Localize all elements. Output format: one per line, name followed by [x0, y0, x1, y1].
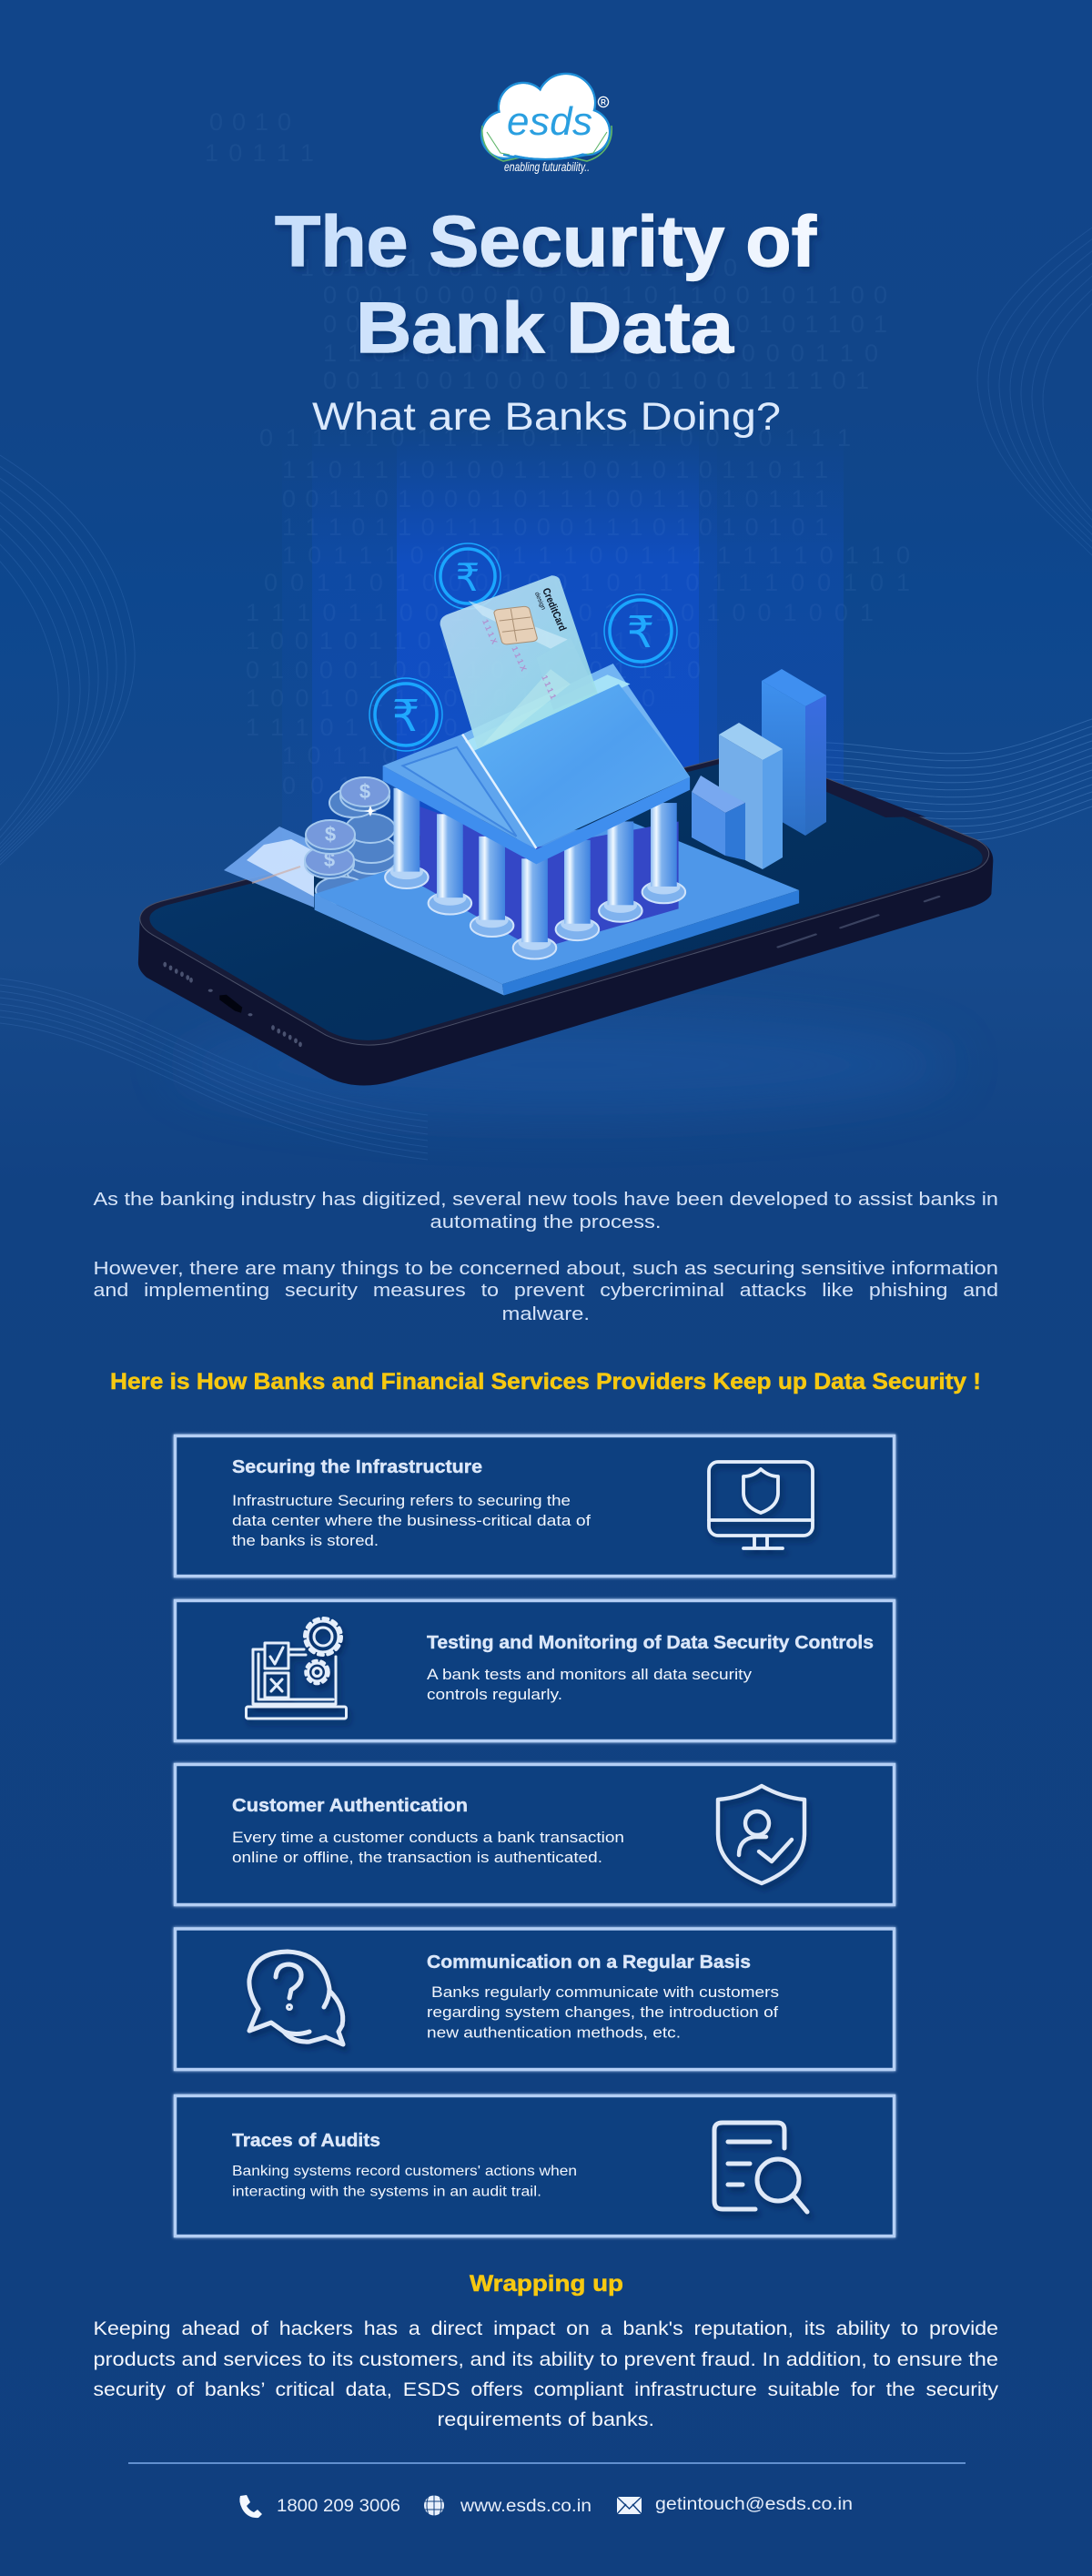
icon: globe: [424, 2495, 444, 2516]
credit card numbers: 1 1 1 1: [540, 674, 558, 701]
panel: customer authentication: [175, 1764, 894, 1904]
binary digit background: 1 1 0 1 1 1 0 1 1 1 1 0 1 1 1 1 0 0 0 0 1 1 0: [323, 340, 878, 367]
panel body text: Banks regularly communicate with customers: [431, 1984, 779, 2001]
binary digit background: 0 0 0 1 0 0 0 0 0 0 0 0 1 1 0 1 1 0 0 1 0 1 1 0 0: [323, 281, 887, 309]
coin with dollar: $: [324, 848, 335, 871]
panel body text: [427, 1984, 779, 2041]
closing paragraph: products and services to its customers, and its ability to prevent fraud. In addition, to ensure the: [93, 2348, 998, 2370]
intro paragraph: [93, 1190, 998, 1324]
phone shadow: [173, 1015, 956, 1115]
logo wordmark: esds: [507, 99, 592, 144]
panel body text: interacting with the systems in an audit trail.: [232, 2185, 541, 2199]
panel: securing the infrastructure: [175, 1436, 894, 1577]
intro paragraph: malware.: [502, 1304, 590, 1324]
panel body text: online or offline, the transaction is authenticated.: [232, 1850, 602, 1866]
banknote: [224, 827, 314, 908]
title: [275, 200, 817, 368]
logo tagline: enabling futurability..: [504, 160, 590, 174]
subtitle: What are Banks Doing?: [312, 395, 781, 439]
registered mark: R: [601, 98, 606, 106]
binary digit background: 0 0 1 1 0 1 0 0 0 1 0 1 1 1 0 0 1 1 0 1 0 1 1 1: [282, 485, 828, 512]
panel heading: Testing and Monitoring of Data Security Controls: [427, 1633, 874, 1653]
footer divider: [128, 2462, 966, 2464]
footer contact row: [239, 2495, 853, 2518]
panel body text: [427, 1667, 753, 1703]
coin with dollar: $: [359, 780, 370, 803]
credit card label: design: [533, 592, 546, 611]
section heading: Here is How Banks and Financial Services Providers Keep up Data Security !: [110, 1369, 981, 1394]
intro paragraph: automating the process.: [430, 1212, 661, 1232]
binary digit background: 0 0 1 1 0 0 1 0 0 0 0 1 1 0 0 1 0 0 1 1 1 1 0 1: [323, 367, 869, 394]
panel body text: data center where the business-critical data of: [232, 1513, 591, 1529]
panel heading: Securing the Infrastructure: [232, 1457, 482, 1477]
bank platform: [315, 821, 799, 996]
binary digit background: 1 0 1 0 0 1 0 0 1 1 1 1 1 0 1 0 1 1 0 0 0: [300, 254, 737, 281]
title: The Security of: [275, 200, 817, 281]
panel: communication on a regular basis: [175, 1929, 894, 2070]
binary digit background: 1 0 1 1 1 0 1 1 0 1 1 1 0 0 1 1 1 1 1 1 1 0 1 1 0: [282, 542, 910, 569]
binary digit background: 0 0 1 1 0 1 1 0 1 1 0 0 0 1 1 1 0 1 0 1 0 1 1 0 1: [323, 310, 887, 338]
closing heading: Wrapping up: [470, 2271, 623, 2297]
bank interior wall: [420, 806, 679, 949]
glow bands behind the illustration: [282, 428, 844, 874]
binary digit background: 0 0 1 0: [209, 108, 291, 136]
binary digit background: 0 0 1 0 1 1 1: [282, 772, 464, 799]
icon: document with magnifier: [714, 2123, 807, 2212]
intro paragraph: As the banking industry has digitized, several new tools have been developed to assist banks in: [93, 1190, 998, 1210]
panel body text: A bank tests and monitors all data security: [427, 1667, 753, 1683]
panel: testing and monitoring: [175, 1600, 894, 1740]
panel body text: regarding system changes, the introduction of: [427, 2004, 778, 2021]
rupee coin icons: [369, 543, 677, 751]
panel body text: new authentication methods, etc.: [427, 2024, 681, 2041]
panel heading: Customer Authentication: [232, 1796, 468, 1816]
bank roof: [383, 664, 690, 864]
closing paragraph: Keeping ahead of hackers has a direct impact on a bank's reputation, its ability to provide: [93, 2317, 998, 2339]
credit card numbers: [480, 605, 558, 714]
panel body text: [232, 1830, 624, 1866]
website: www.esds.co.in: [460, 2497, 592, 2516]
icon: phone: [239, 2495, 262, 2518]
panel body text: [232, 1493, 591, 1549]
icon: shield with user check: [718, 1786, 804, 1883]
phone number: 1800 209 3006: [277, 2497, 400, 2516]
binary digit background: 1 0 0 1 0 1 1 1 0 1 0 1 1 0 1 1 0: [246, 685, 655, 712]
panel heading: Communication on a Regular Basis: [427, 1952, 751, 1973]
icon: checklist with gears: [246, 1618, 346, 1719]
bank roof right face: [474, 684, 690, 847]
coin with dollar: $: [325, 823, 336, 846]
closing paragraph: [93, 2317, 998, 2430]
icon: envelope: [617, 2497, 642, 2514]
binary digit background: 1 1 1 0 1 1 0 0 1 1 0 1 0 0 1 1 1 0 1 0 0 1 0 0 1: [246, 599, 874, 626]
binary digit background: 1 0 1 1 1: [205, 139, 314, 167]
panel: traces of audits: [175, 2095, 894, 2236]
credit card numbers: 1 1 1 X: [480, 618, 500, 645]
phone side buttons: [778, 897, 939, 947]
binary digit background: 1 1 1 0 1 1 0 1 1 1 0 0 0 1 1 1 0 1 0 1 0 1 0 1: [282, 513, 828, 541]
phone screen: [149, 755, 983, 1040]
bank columns: [385, 788, 685, 959]
intro paragraph: and implementing security measures to prevent cybercriminal attacks like phishing and: [93, 1281, 998, 1301]
phone notch: [826, 779, 926, 817]
binary digit background: 1 1 0 1 1 1 0 1 0 0 1 1 1 0 0 1 0 1 0 1 1 0 1 1: [282, 456, 828, 483]
panel body text: Infrastructure Securing refers to securing the: [232, 1493, 571, 1509]
credit card: [440, 575, 599, 749]
rupee coin icons: ₹: [627, 609, 654, 657]
registered mark: [598, 96, 609, 107]
hero illustration: phone with bank: [138, 543, 993, 1115]
intro paragraph: However, there are many things to be concerned about, such as securing sensitive information: [93, 1259, 998, 1279]
rupee coin icons: ₹: [392, 693, 420, 741]
binary digit background: 1 0 0 1 0 1 1 0 0 1 0 1 1 0 1 1 0 1 0: [246, 627, 701, 654]
title: Bank Data: [356, 287, 734, 368]
closing paragraph: requirements of banks.: [437, 2409, 654, 2430]
panel body text: [232, 2164, 577, 2199]
panel body text: the banks is stored.: [232, 1533, 379, 1549]
panel heading: Traces of Audits: [232, 2131, 380, 2151]
binary digit background: 0 1 0 0 0 1 0 0 1 1 0 0 1 0 0 1 1 1 0: [246, 656, 701, 684]
binary digit background: 1 0 1 1 0 1 0 0 1 1 0 0 1 1 1: [282, 742, 646, 769]
credit card label: CreditCard: [540, 586, 568, 633]
phone speaker and port: [163, 962, 302, 1047]
icon: monitor with shield: [709, 1462, 813, 1548]
binary digit background: 0 1 1 1 1 0 1 1 1 1 0 1 1 1 1 1 0 0 1 0 1 1 1: [259, 424, 851, 451]
closing paragraph: security of banks’ critical data, ESDS offers compliant infrastructure suitable for the security: [93, 2378, 998, 2400]
binary digit background: 1 1 1 0 1 0 1 1 0 1 0 0 1 1 0 1 1: [246, 714, 655, 741]
credit card numbers: 1 1 1 X: [510, 645, 529, 673]
bar chart: growth bars: [692, 669, 826, 869]
binary digit background: 0 0 1 1 0 1 0 0 0 1 0 0 1 0 1 1 0 1 1 1 0 0 1 0 1: [264, 569, 910, 596]
panel body text: Banking systems record customers' actions when: [232, 2164, 577, 2179]
credit card label: [533, 586, 568, 635]
binary digit background: [205, 108, 910, 799]
email: getintouch@esds.co.in: [655, 2495, 853, 2514]
rupee coin icons: ₹: [456, 556, 480, 599]
panel body text: controls regularly.: [427, 1687, 562, 1703]
coin stacks: [305, 777, 396, 904]
phone body: [138, 749, 993, 1085]
icon: question speech bubbles: [249, 1952, 343, 2044]
logo: esds cloud: [481, 74, 612, 174]
panel body text: Every time a customer conducts a bank transaction: [232, 1830, 624, 1846]
